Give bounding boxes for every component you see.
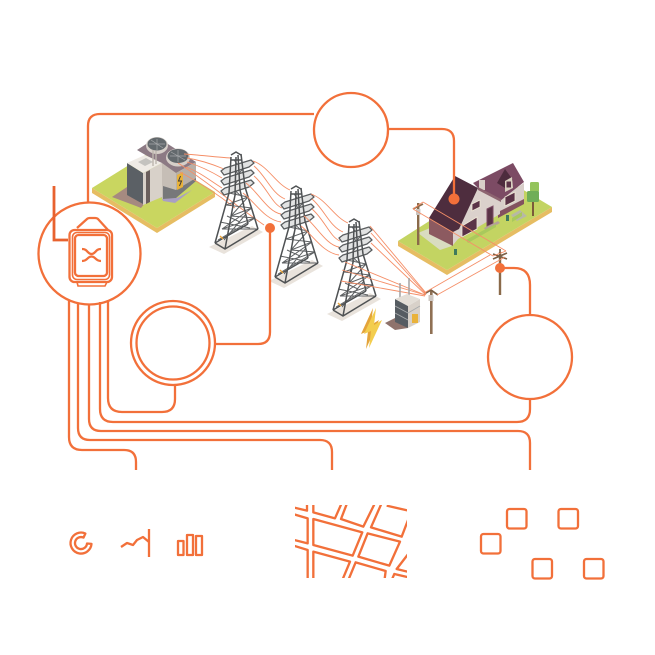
map: street grid bbox=[295, 505, 407, 578]
icon: square markers bbox=[481, 509, 604, 578]
icon: utility pole at the road bbox=[493, 249, 507, 295]
icon: transformer bbox=[385, 278, 420, 330]
icon: transmission tower 2 bbox=[269, 186, 323, 288]
connector: pole node to right circle bbox=[500, 268, 530, 315]
panel: power plant on green plot bbox=[92, 137, 215, 233]
icon: transmission tower 1 bbox=[209, 152, 263, 254]
wires: tower 1 to tower 2 bbox=[243, 161, 290, 222]
icon: gauge ring bbox=[71, 533, 92, 554]
icon: line chart bbox=[121, 529, 149, 557]
node dot on house bbox=[448, 194, 460, 204]
icon: lightning bolt bbox=[361, 308, 382, 349]
panel: house on green plot bbox=[398, 163, 552, 275]
L-shaped antenna line bbox=[54, 186, 68, 240]
wires: plant to first tower bbox=[178, 154, 264, 225]
node dot on pole bbox=[495, 263, 505, 273]
node dot on tower line bbox=[265, 223, 275, 233]
connector: tower node to double circle bbox=[215, 228, 270, 344]
connector: top circle to house bbox=[388, 129, 454, 199]
connector: sensor to right panel bbox=[89, 304, 530, 470]
icon: utility pole by the house bbox=[413, 203, 423, 245]
circle: top empty node bbox=[314, 93, 388, 167]
connector: sensor to map panel bbox=[78, 303, 332, 470]
connector: sensor to charts panel bbox=[69, 300, 136, 470]
circle: right empty node bbox=[488, 315, 572, 399]
icon: tree beside the house bbox=[527, 182, 539, 216]
icon: battery device bbox=[70, 218, 112, 286]
connector: sensor to top circle bbox=[88, 114, 314, 203]
circle: double-ring node bbox=[131, 301, 215, 385]
smart grid diagram bbox=[37, 92, 605, 580]
icon: utility pole near transformer bbox=[424, 290, 438, 334]
wires: tower 3 to poles and house bbox=[341, 202, 506, 296]
sensor circle with device icon bbox=[38, 186, 140, 304]
connector: sensor to right circle bbox=[100, 302, 530, 422]
icon: bar chart bbox=[178, 535, 202, 555]
wires: tower 2 to tower 3 bbox=[301, 194, 348, 255]
icon: transmission tower 3 bbox=[327, 219, 381, 321]
connector: sensor to double circle bbox=[108, 300, 175, 412]
